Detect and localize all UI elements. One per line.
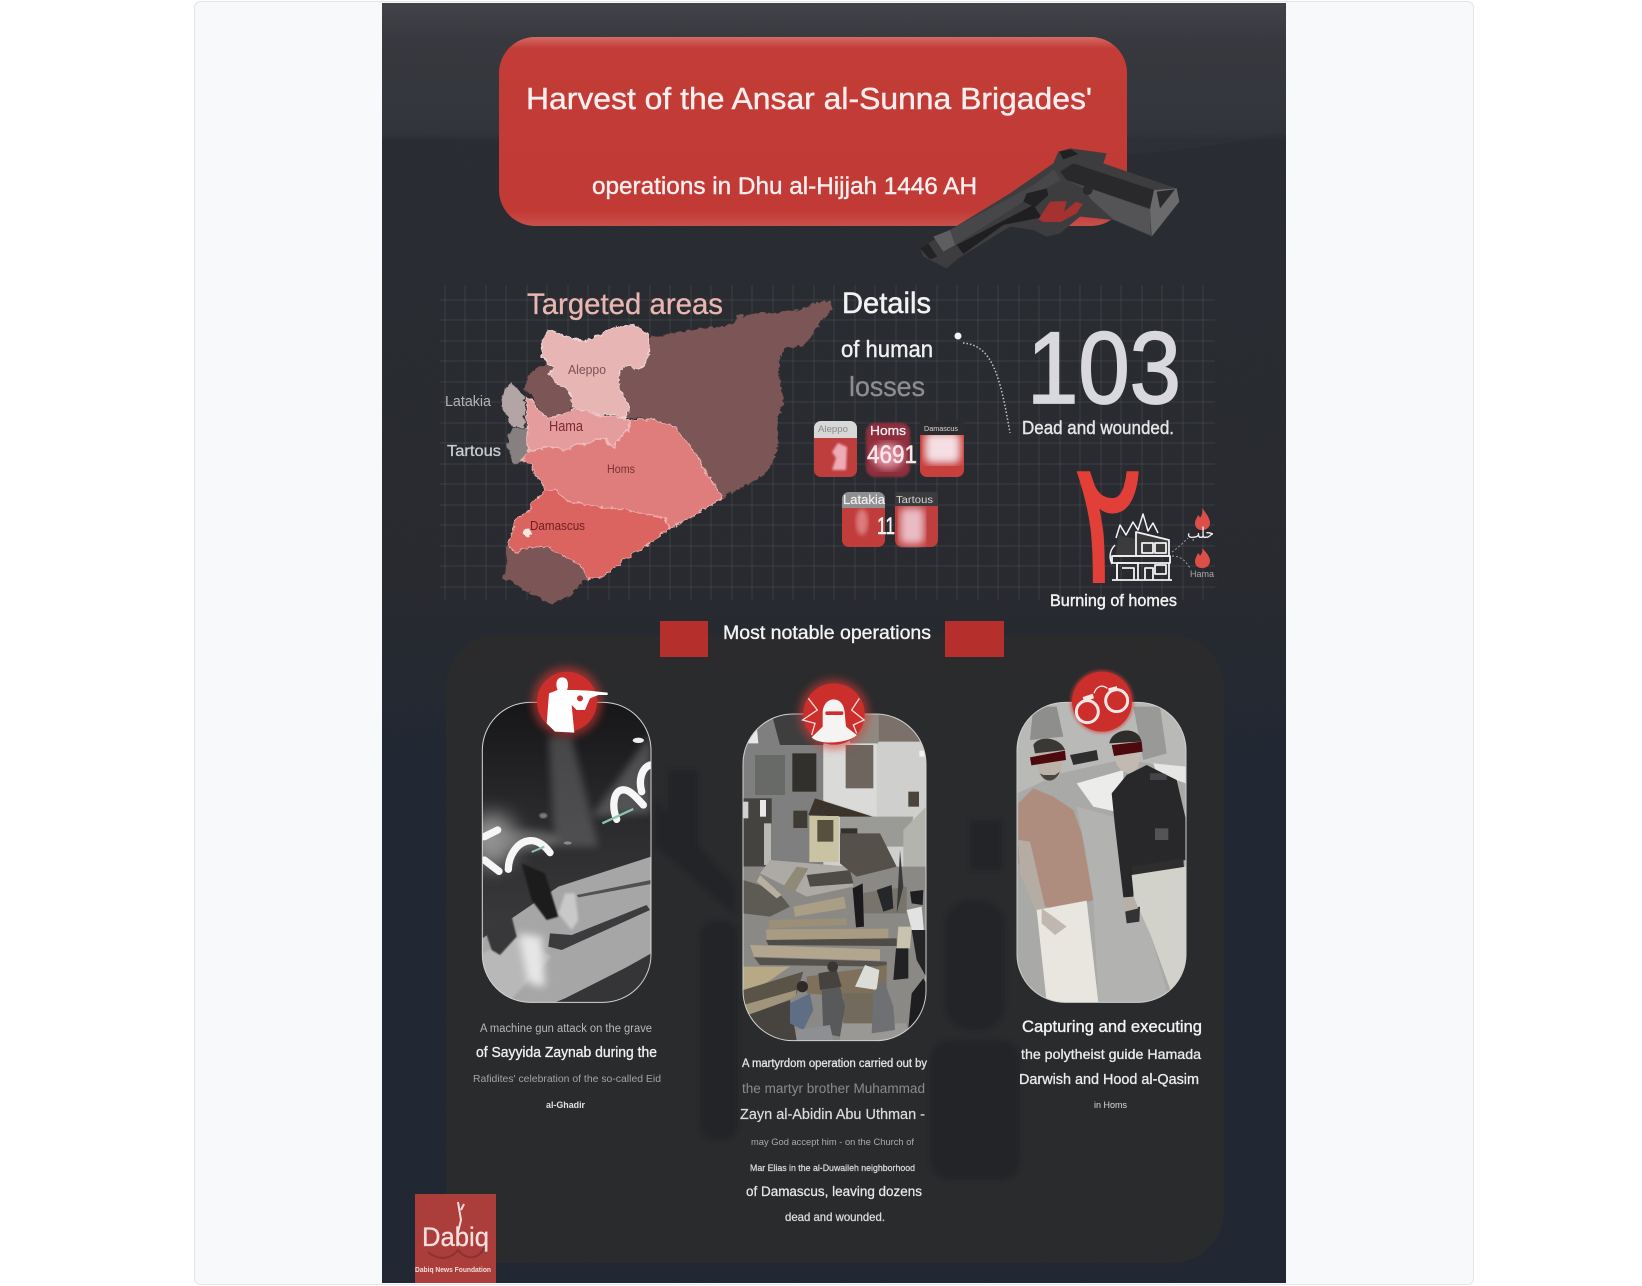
caption: capturing and executing: the polytheist guide Hamada [1021, 1046, 1201, 1062]
stat: 4691: 4691 [867, 441, 917, 469]
icon: pistol [920, 148, 1179, 268]
poster background [382, 3, 1286, 1283]
logo: Dabiq News Foundation [415, 1194, 496, 1283]
heading: details of human losses [841, 287, 933, 402]
map of Syria [500, 300, 831, 603]
title banner [499, 37, 1127, 226]
right man [1112, 765, 1186, 897]
caption: capturing and executing: Darwish and Hood al-Qasim [1019, 1072, 1199, 1088]
numeral: Arabic two: ٢ [1071, 420, 1145, 625]
logo: Dabiq News Foundation: Dabiq [422, 1222, 489, 1252]
region: southern Syria [502, 544, 588, 603]
caption: machine gun attack: Rafidites' celebration of the so-called Eid [473, 1073, 661, 1085]
stat: 103 dead and wounded: 103 [1027, 311, 1181, 425]
figures [853, 883, 864, 927]
governorate tile: Tartous: Tartous [896, 495, 933, 506]
neon streaks [484, 765, 650, 871]
heading: details of human losses: losses [849, 371, 925, 402]
rubble floor [743, 867, 926, 1041]
caption: martyrdom operation: of Damascus, leaving dozens [746, 1184, 922, 1199]
caption: martyrdom operation [740, 1058, 927, 1224]
background grid [440, 285, 1215, 600]
background ghost imagery [655, 770, 1020, 1180]
caption: burning of homes: Burning of homes [1050, 591, 1177, 610]
caption: capturing and executing [1019, 1018, 1202, 1111]
heading: details of human losses: of human [841, 336, 933, 362]
map labels: Homs [607, 462, 635, 476]
label: Hama: Hama [1190, 569, 1215, 580]
callout connector [954, 332, 1010, 433]
page card background [194, 2, 1474, 1284]
region: Hama [525, 397, 628, 450]
title line 1: Harvest of the Ansar al-Sunna Brigades' [526, 81, 1092, 116]
map labels: Damascus [530, 518, 585, 533]
governorate tile: Latakia [842, 492, 885, 547]
stat: 103 dead and wounded: Dead and wounded. [1022, 418, 1174, 438]
caption: machine gun attack: al-Ghadir [546, 1100, 585, 1111]
governorate tile: Homs: Homs [870, 423, 907, 438]
icon: shooter [532, 666, 608, 737]
wall icons [755, 755, 785, 795]
shrine [809, 816, 839, 862]
logo: Dabiq News Foundation: Dabiq News Foundation [415, 1265, 491, 1274]
heading: targeted areas: Targeted areas [527, 288, 723, 321]
map labels: Latakia [445, 393, 492, 410]
label: Aleppo in Arabic: حلب [1187, 524, 1214, 542]
governorate tile: Aleppo: Aleppo [818, 424, 848, 434]
icon: flame, Aleppo [1195, 508, 1210, 530]
photo: gunfire at night [467, 702, 651, 1002]
caption: martyrdom operation: may God accept him - on the Church of [751, 1137, 914, 1148]
map labels: Tartous [447, 443, 501, 460]
governorate tile: Homs [866, 423, 910, 477]
photo: destroyed church [743, 714, 926, 1041]
icon: handcuffs [1070, 670, 1134, 734]
icon: flame, Hama [1195, 548, 1210, 568]
caption: capturing and executing: in Homs [1094, 1100, 1127, 1111]
caption: machine gun attack [473, 1023, 661, 1111]
governorate tile: Damascus [920, 421, 964, 477]
governorate tile: Tartous [895, 492, 938, 547]
region: Tartous [507, 427, 527, 463]
caption: martyrdom operation: Zayn al-Abidin Abu Uthman - [740, 1106, 925, 1123]
caption: martyrdom operation: Mar Elias in the al-Duwaileh neighborhood [750, 1163, 915, 1173]
map labels: Hama [549, 418, 584, 435]
title line 2: operations in Dhu al-Hijjah 1446 AH [592, 173, 977, 200]
icon: burning house [1110, 514, 1190, 580]
region: Idlib [522, 362, 572, 417]
stat: 11: 11 [877, 513, 895, 540]
caption: martyrdom operation: A martyrdom operation carried out by [742, 1058, 927, 1070]
infographic canvas [194, 1, 1474, 1285]
left man [1018, 788, 1093, 912]
map labels: Aleppo [568, 362, 606, 377]
collapsed roof [808, 798, 874, 817]
floor [482, 857, 651, 1002]
caption: martyrdom operation: the martyr brother Muhammad [742, 1081, 925, 1096]
caption: machine gun attack: A machine gun attack on the grave [480, 1023, 652, 1035]
caption: martyrdom operation: dead and wounded. [785, 1210, 885, 1224]
left pillar [743, 798, 772, 867]
governorate tile: Aleppo [814, 421, 857, 477]
icon: explosion figure [799, 679, 869, 749]
governorate tile: Latakia: Latakia [843, 493, 885, 507]
red square right [945, 621, 1004, 657]
heading: most notable operations: Most notable operations [723, 622, 931, 644]
map labels [445, 362, 635, 533]
heading: most notable operations [660, 621, 1004, 657]
region: Damascus [507, 488, 668, 578]
region: Homs [520, 418, 721, 528]
caption: capturing and executing: Capturing and executing [1022, 1018, 1202, 1036]
caption: machine gun attack: of Sayyida Zaynab during the [476, 1045, 657, 1061]
marker: Damascus city [523, 528, 530, 535]
region: Latakia [500, 383, 524, 427]
red square left [660, 621, 708, 657]
photo: two captives [1017, 702, 1186, 1002]
heading: details of human losses: Details [842, 287, 931, 320]
panel: most notable operations [446, 635, 1224, 1263]
region: eastern Syria [617, 300, 831, 497]
region: Aleppo [540, 323, 648, 417]
governorate tile: Damascus: Damascus [924, 424, 958, 433]
